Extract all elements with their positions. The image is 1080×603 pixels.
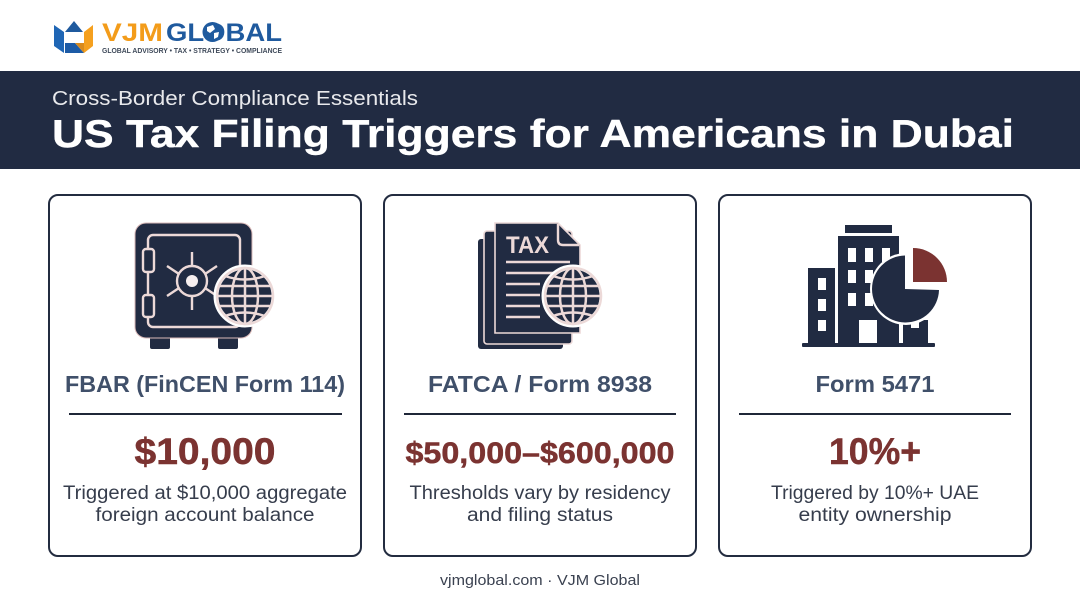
description: Triggered at $10,000 aggregate [63,483,347,504]
description [771,483,979,526]
description: foreign account balance [96,505,314,526]
subtitle: Cross-Border Compliance Essentials [52,88,418,110]
heading: FBAR (FinCEN Form 114) [65,371,345,397]
heading: FATCA / Form 8938 [428,371,652,397]
title: US Tax Filing Triggers for Americans in Dubai [52,113,1014,156]
big number: $50,000–$600,000 [406,437,674,470]
big number: 10%+ [829,431,921,472]
icon: globe in logo wordmark [202,22,222,42]
icon: logo mark [54,21,93,53]
logo tagline: GLOBAL ADVISORY • TAX • STRATEGY • COMPLIANCE [102,48,282,55]
description: and filing status [467,505,613,526]
logo wordmark GLOBAL: GLOBAL [166,19,282,47]
description [410,483,671,526]
description: entity ownership [798,505,952,526]
panel: FATCA [384,195,696,556]
icon: tax documents with globe [478,223,602,349]
panel: FBAR [49,195,361,556]
footer: vjmglobal.com · VJM Global [440,572,640,589]
icon: buildings with pie chart [802,225,947,347]
description: Thresholds vary by residency [410,483,671,504]
header band [0,71,1080,169]
logo [54,19,282,55]
icon: tax documents with globe: TAX [506,232,549,259]
logo wordmark VJM: VJM [102,19,163,47]
description [63,483,347,526]
panel: Form 5471 [719,195,1031,556]
heading: Form 5471 [816,371,935,397]
big number: $10,000 [134,431,276,472]
description: Triggered by 10%+ UAE [771,483,979,504]
icon: safe with globe [135,223,274,349]
